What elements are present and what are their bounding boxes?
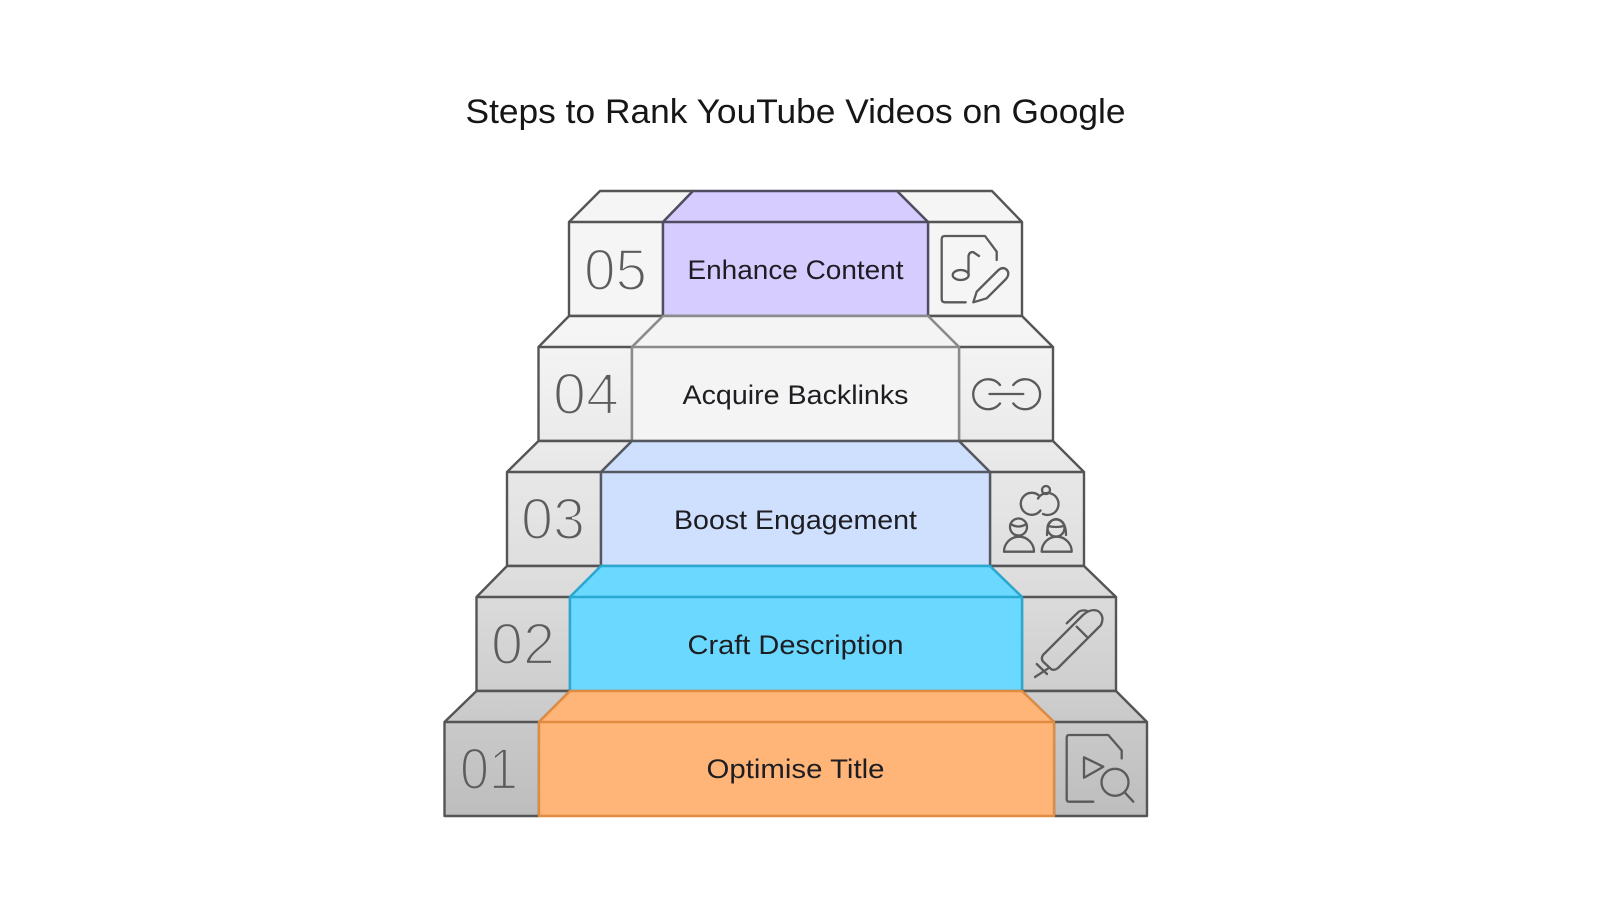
icon: chain link: [973, 379, 1040, 409]
icon: pen: [1035, 610, 1102, 677]
icon: music document with pencil: [942, 236, 1008, 302]
step 04: Acquire Backlinks: [538, 316, 1053, 441]
label: Optimise Title: Optimise Title: [706, 754, 884, 784]
number 01: 01: [460, 737, 518, 802]
side blocks: step 05: [569, 191, 1022, 316]
number 04: 04: [553, 362, 619, 427]
number 03: 03: [521, 487, 585, 552]
icon: people with linked rings: [1004, 486, 1072, 552]
step 01: Optimise Title: [444, 691, 1147, 816]
label: Acquire Backlinks: Acquire Backlinks: [682, 380, 908, 410]
label: Enhance Content: Enhance Content: [688, 255, 904, 285]
centre panel: step 05: [663, 191, 928, 316]
side blocks: step 01: [444, 691, 1147, 816]
step 03: Boost Engagement: [507, 441, 1084, 566]
side blocks: step 02: [476, 566, 1116, 691]
side blocks: step 03: [507, 441, 1084, 566]
centre panel: step 01: [539, 691, 1054, 816]
number 02: 02: [491, 612, 555, 677]
side blocks: step 04: [538, 316, 1053, 441]
step 05: Enhance Content: [569, 191, 1022, 316]
centre panel: step 04: [632, 316, 959, 441]
label: Boost Engagement: Boost Engagement: [674, 505, 918, 535]
icon: video document with magnifier: [1067, 735, 1133, 802]
centre panel: step 02: [570, 566, 1022, 691]
number 05: 05: [584, 238, 647, 303]
step 02: Craft Description: [476, 566, 1116, 691]
label: Craft Description: Craft Description: [688, 630, 904, 660]
title: Steps to Rank YouTube Videos on Google: [466, 93, 1126, 131]
centre panel: step 03: [601, 441, 990, 566]
